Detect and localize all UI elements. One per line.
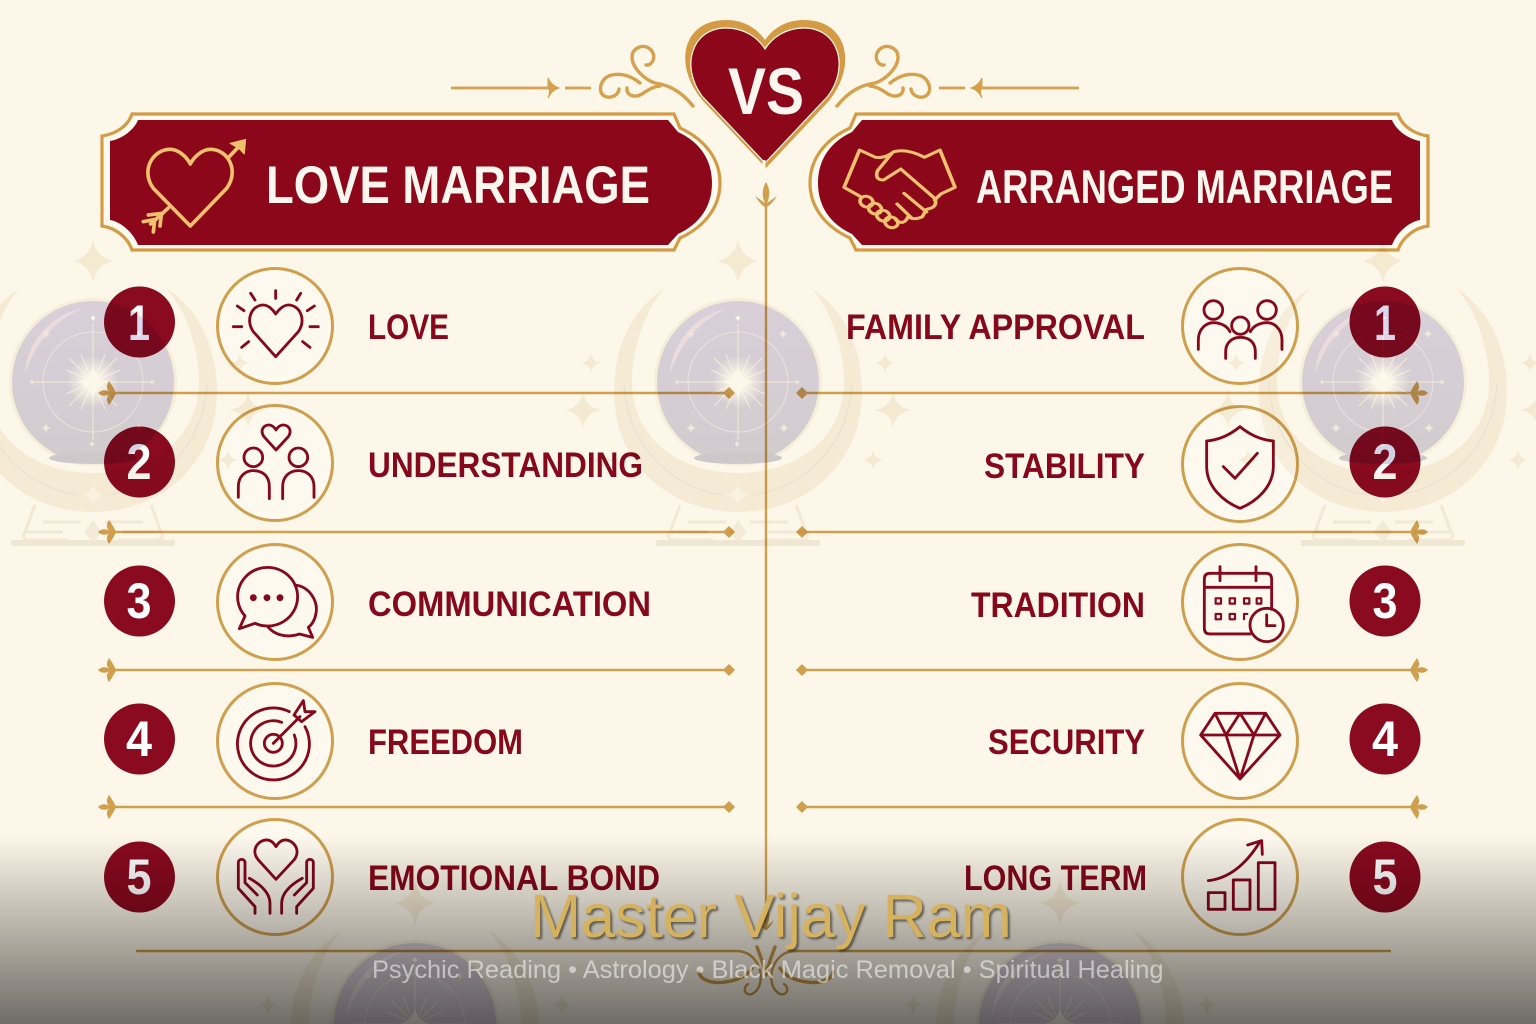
footer tagline: Psychic Reading • Astrology • Black Magic Removal • Spiritual Healing <box>372 956 1164 984</box>
vs heart badge <box>685 20 845 171</box>
label: stability: STABILITY <box>984 446 1145 486</box>
number 2: 2 <box>126 434 152 490</box>
number 3: 3 <box>126 573 152 629</box>
label: understanding: UNDERSTANDING <box>368 445 643 485</box>
number 4 <box>104 704 175 774</box>
label: security: SECURITY <box>988 722 1145 762</box>
label: tradition: TRADITION <box>971 585 1145 625</box>
label: emotional bond: EMOTIONAL BOND <box>368 858 660 898</box>
right row 1: family approval <box>846 268 1420 384</box>
icon: radiant heart <box>218 268 332 384</box>
heading: arranged marriage: ARRANGED MARRIAGE <box>976 160 1393 213</box>
heading: love marriage: LOVE MARRIAGE <box>266 156 650 215</box>
top ornament: left scroll <box>451 46 693 106</box>
left row 2: understanding <box>104 406 643 520</box>
icon: handshake <box>844 150 955 230</box>
bottom shade <box>0 835 1536 1024</box>
number 5: 5 <box>1372 849 1398 905</box>
icon: family <box>1182 268 1298 384</box>
top ornament: right scroll <box>837 46 1079 106</box>
icon: calendar with clock <box>1182 544 1298 660</box>
row separators right <box>796 381 1428 819</box>
icon: diamond <box>1182 684 1298 798</box>
icon: chat bubbles <box>218 544 332 660</box>
right row 5: long term <box>964 820 1420 934</box>
watermark: crystal balls <box>0 239 1536 1024</box>
icon: target with arrow <box>218 684 332 798</box>
number 2: 2 <box>1372 434 1398 490</box>
row separators left <box>98 381 735 819</box>
right row 4: security <box>988 684 1420 798</box>
icon: growth chart <box>1182 820 1298 934</box>
label: communication: COMMUNICATION <box>368 584 651 624</box>
left row 3: communication <box>104 544 651 660</box>
left row 4: freedom <box>104 684 523 798</box>
number 5 <box>104 842 175 912</box>
number 1 <box>1350 286 1420 358</box>
number 3: 3 <box>1372 573 1398 629</box>
icon: heart with arrow <box>143 139 246 232</box>
vs label: VS <box>728 54 804 128</box>
number 3 <box>104 566 175 636</box>
icon: shield with check <box>1182 406 1298 522</box>
number 4: 4 <box>1372 711 1398 767</box>
label: long term: LONG TERM <box>964 858 1147 898</box>
number 2 <box>104 426 175 498</box>
number 4 <box>1350 704 1420 774</box>
number 5 <box>1350 842 1420 912</box>
number 2 <box>1350 426 1420 498</box>
footer rule with flourish <box>137 947 1390 994</box>
banner: love marriage <box>102 114 720 250</box>
icon: hands holding heart <box>218 820 332 934</box>
number 1: 1 <box>128 295 150 351</box>
left row 1: love <box>104 268 449 384</box>
number 1 <box>104 286 175 358</box>
number 5: 5 <box>126 849 152 905</box>
banner: arranged marriage <box>810 114 1428 250</box>
vertical divider <box>755 182 777 930</box>
label: freedom: FREEDOM <box>368 722 523 762</box>
left row 5: emotional bond <box>104 820 660 934</box>
number 1: 1 <box>1374 295 1396 351</box>
footer name: Master Vijay Ram <box>530 882 1012 950</box>
number 3 <box>1350 566 1420 636</box>
right row 2: stability <box>984 406 1420 522</box>
number 4: 4 <box>126 711 152 767</box>
label: love: LOVE <box>368 307 449 347</box>
label: family approval: FAMILY APPROVAL <box>846 307 1145 347</box>
icon: couple with heart <box>218 406 332 520</box>
right row 3: tradition <box>971 544 1420 660</box>
